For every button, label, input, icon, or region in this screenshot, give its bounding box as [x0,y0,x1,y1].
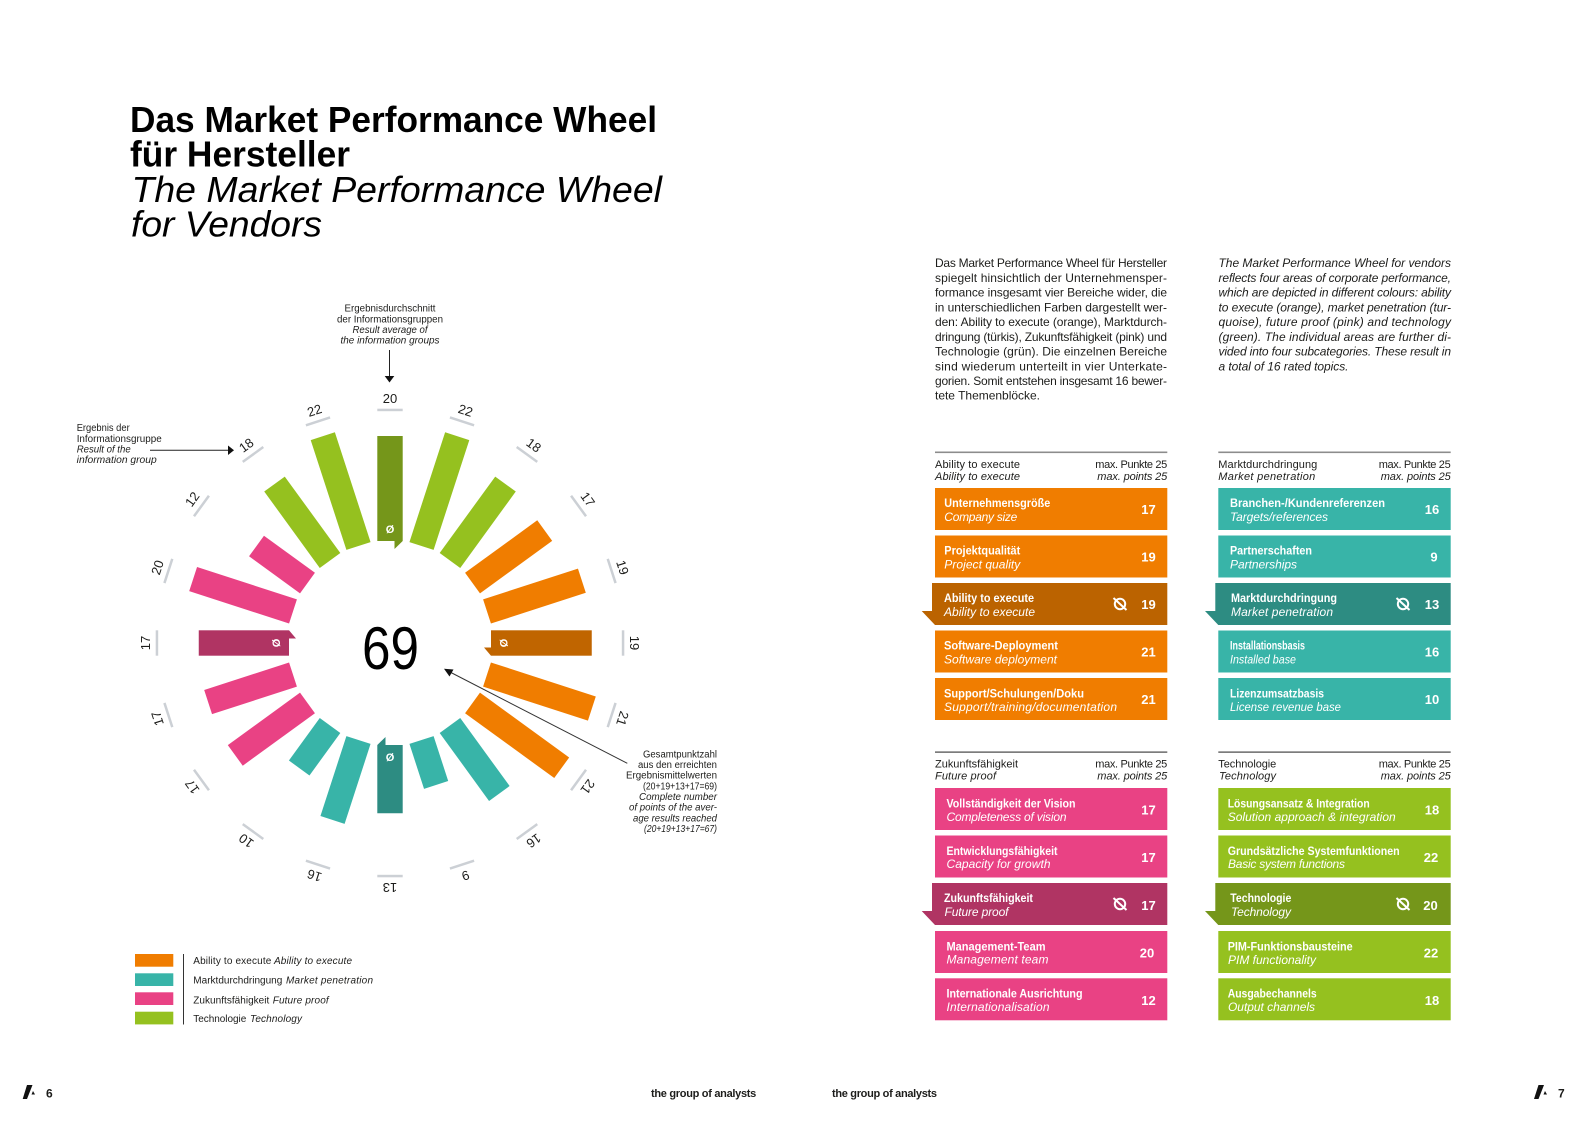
row: Projektqualität 19: 19 [1141,550,1156,564]
row: Ausgabechannels 18: 18 [1425,993,1439,1008]
callout: result average of the information groups: the information groups [340,336,440,347]
spoke: market penetration average 13: 13 [383,880,397,895]
panel heading: future proof: Future proof [935,771,997,783]
row: Ability to execute average 19: 19 [1141,597,1156,612]
panel heading: ability to execute: Ability to execute [935,459,1020,471]
panel heading: ability to execute: max. points 25 [1097,471,1168,483]
spoke: future proof 17: 17 [148,709,167,728]
text block: English intro: reflects four areas of corporate performance, [1218,271,1451,285]
arrow: to average result [385,350,394,382]
callout: total score explanation: (20+19+13+17=67) [644,824,717,835]
row: Grundsätzliche Systemfunktionen 22: 22 [1424,850,1438,865]
panel: market penetration [1205,452,1452,720]
callout: total score explanation [626,749,718,835]
row: Installationsbasis 16: Installed base [1230,652,1296,666]
text block: German intro: formance insgesamt vier Bereiche wider, die [935,286,1167,300]
spoke: future proof average 17: 17 [138,636,153,650]
arrow: to group result [150,446,234,455]
spoke: technology 18: 18 [523,435,544,456]
row: PIM-Funktionsbausteine 22: 22 [1424,946,1438,960]
spoke: technology 18 [232,432,340,568]
row: Vollständigkeit der Vision 17: 17 [1141,802,1156,818]
row: Vollständigkeit der Vision 17 [935,788,1167,830]
text block: German intro: sind wiederum unterteilt in vier Unterkate- [935,359,1167,373]
row: PIM-Funktionsbausteine 22: PIM functionality [1228,953,1317,967]
text block: German intro: Technologie (grün). Die einzelnen Bereiche [935,344,1167,358]
panel heading: market penetration: max. Punkte 25 [1379,459,1451,471]
row: Software-Deployment 21: Software deployment [944,652,1058,666]
title: The Market Performance Wheel [132,169,663,210]
text block: German intro: tete Themenblöcke. [935,388,1040,402]
spoke: market penetration average 13 [377,737,403,895]
row: Lizenzumsatzbasis 10 [1218,678,1451,720]
callout: total score explanation: Gesamtpunktzahl [643,749,717,760]
spoke: ability 19: 19 [613,558,632,577]
spoke: future proof 12 [179,485,315,593]
row: Zukunftsfähigkeit average 17: 17 [1141,898,1156,913]
spoke: future proof average 17 [138,630,296,656]
legend: Technology [250,1014,303,1025]
footer: left logo and page number: 6 [46,1086,53,1100]
row: PIM-Funktionsbausteine 22: PIM-Funktionsbausteine [1228,939,1353,953]
text block: English intro: a total of 16 rated topics. [1218,359,1348,373]
text block: English intro [1218,256,1452,373]
spoke: technology 22 [409,399,480,550]
row: Projektqualität 19: Projektqualität [944,544,1020,558]
text block: German intro: den: Ability to execute (orange), Marktdurch- [935,315,1167,329]
row: Software-Deployment 21 [935,630,1167,672]
row: Internationale Ausrichtung 12: Internationalisation [946,1000,1050,1014]
row: Installationsbasis 16 [1218,630,1451,672]
row: Entwicklungsfähigkeit 17: Capacity for growth [946,857,1051,871]
row: Marktdurchdringung average 13 [1205,583,1451,625]
row: Support/Schulungen/Doku 21: Support/training/documentation [944,700,1117,714]
callout: result of the information group: Informationsgruppe [77,434,162,445]
row: PIM-Funktionsbausteine 22 [1218,931,1451,973]
spoke: future proof 17: 17 [182,776,203,797]
callout: result average of the information groups: Ergebnisdurchschnitt [344,304,436,315]
row: Ausgabechannels 18: Ausgabechannels [1228,987,1317,1001]
panel heading: future proof: Zukunftsfähigkeit [935,759,1018,771]
spoke: future proof average 17: Ø [271,638,283,647]
row: Lösungsansatz & Integration 18 [1218,788,1451,830]
row: Partnerschaften 9: Partnerships [1230,558,1297,572]
callout: total score explanation: (20+19+13+17=69) [643,781,717,792]
row: Ability to execute average 19 [922,583,1167,625]
legend: Zukunftsfähigkeit [193,995,270,1006]
row: Vollständigkeit der Vision 17: Vollständigkeit der Vision [946,796,1076,810]
row: Partnerschaften 9: Partnerschaften [1230,544,1312,558]
panel heading: technology: max. Punkte 25 [1379,759,1451,771]
spoke: market penetration 9 [409,736,480,887]
row: Management-Team 20: Management-Team [946,939,1046,953]
callout: total score explanation: age results reached [633,813,717,824]
row: Marktdurchdringung average 13: Marktdurchdringung [1231,591,1337,605]
legend: Technologie [193,1014,247,1025]
row: Support/Schulungen/Doku 21 [935,678,1167,720]
callout: result of the information group [77,423,162,466]
row: Lösungsansatz & Integration 18: Solution approach & integration [1228,810,1396,824]
spoke: market penetration 10 [232,718,340,854]
text block: German intro: in unterschiedlichen Farben dargestellt wer- [935,300,1167,314]
row: Partnerschaften 9: 9 [1430,550,1438,564]
spoke: market penetration 16: 16 [305,866,324,885]
title: for Vendors [131,204,322,244]
row: Grundsätzliche Systemfunktionen 22 [1218,836,1451,878]
row: Software-Deployment 21: 21 [1141,644,1156,660]
row: Partnerschaften 9 [1218,536,1451,578]
row: Internationale Ausrichtung 12 [935,978,1167,1020]
text block: English intro: to execute (orange), market penetration (tur- [1218,300,1451,314]
spoke: ability 17: 17 [577,489,598,510]
callout: result of the information group: Ergebnis der [77,423,130,434]
spoke: technology 22 [300,399,371,550]
row: Unternehmensgröße 17: Unternehmensgröße [944,496,1051,510]
footer: right publisher: the group of analysts [832,1088,937,1100]
row: Technologie average 20 [1205,883,1451,925]
title: Das Market Performance Wheel [130,99,657,140]
text block: German intro [935,256,1167,402]
row: Support/Schulungen/Doku 21: 21 [1141,692,1156,707]
panel heading: market penetration: Market penetration [1218,471,1315,483]
footer: right logo and page number: 7 [1558,1086,1565,1100]
row: Lösungsansatz & Integration 18: 18 [1425,802,1439,818]
row: Installationsbasis 16: 16 [1425,644,1439,660]
spoke: ability average 19: Ø [497,639,509,648]
callout: result average of the information groups: Result average of [352,325,429,336]
row: Internationale Ausrichtung 12: Internationale Ausrichtung [946,987,1082,1001]
row: Lizenzumsatzbasis 10: License revenue base [1230,700,1341,714]
row: Technologie average 20: Technologie [1230,891,1292,905]
spoke: market penetration 16 [440,718,548,854]
spoke: ability 21 [483,662,634,733]
spoke: technology 18: 18 [236,435,257,456]
callout: total score explanation: aus den erreichten [638,760,717,771]
text block: German intro: dringung (türkis), Zukunftsfähigkeit (pink) und [935,330,1167,344]
legend [135,954,373,1025]
spoke: ability 17 [465,485,601,593]
row: Internationale Ausrichtung 12: 12 [1141,993,1156,1008]
callout: total score explanation: Ergebnismittelwerten [626,771,717,782]
row: Branchen-/Kundenreferenzen 16: Targets/references [1230,510,1328,524]
spoke: future proof 12: 12 [182,489,203,510]
row: Installationsbasis 16: Installationsbasis [1230,638,1305,652]
callout: total score explanation: Complete number [639,792,718,803]
row: Ausgabechannels 18 [1218,978,1451,1020]
callout: result average of the information groups: der Informationsgruppen [337,314,443,325]
row: Zukunftsfähigkeit average 17 [922,883,1167,925]
row: Ability to execute average 19: Ability to execute [944,591,1034,605]
spoke: market penetration 9: 9 [460,867,471,884]
panel heading: future proof: max. Punkte 25 [1095,759,1167,771]
text block: German intro: gorien. Somit entstehen insgesamt 16 bewer- [935,374,1167,388]
row: Lizenzumsatzbasis 10: 10 [1425,692,1439,707]
callout: total score explanation: of points of the aver- [629,803,718,814]
legend: Marktdurchdringung [193,975,282,986]
legend: Market penetration [286,975,373,986]
callout: result of the information group: Result of the [77,445,131,456]
panel: technology [1205,752,1452,1020]
text block: German intro: Das Market Performance Wheel für Hersteller [935,256,1167,270]
row: Software-Deployment 21: Software-Deployment [944,638,1058,652]
spoke: market penetration 10: 10 [236,830,257,851]
spoke: ability 21: 21 [613,709,632,728]
row: Projektqualität 19 [935,536,1167,578]
spoke: technology average 20 [377,391,403,549]
spoke: technology 22: 22 [456,401,475,420]
spoke: ability average 19: 19 [627,636,642,650]
row: Unternehmensgröße 17: 17 [1141,502,1156,517]
spoke: ability 19 [483,553,634,624]
row: Management-Team 20: 20 [1140,946,1154,960]
spoke: market penetration 16: 16 [523,830,544,851]
row: Technologie average 20: 20 [1423,898,1438,913]
spoke: market penetration average 13: Ø [386,752,395,764]
row: Management-Team 20: Management team [946,952,1048,966]
panel heading: future proof: max. points 25 [1097,771,1168,783]
row: Grundsätzliche Systemfunktionen 22: Grundsätzliche Systemfunktionen [1228,844,1400,858]
legend: Ability to execute [273,956,352,967]
panel heading: future proof [935,759,1168,783]
spoke: future proof 17 [146,662,297,733]
row: Unternehmensgröße 17: Company size [944,510,1018,524]
spoke: technology 22: 22 [305,401,324,420]
row: Zukunftsfähigkeit average 17: Future proof [944,905,1010,919]
text block: English intro: The Market Performance Wheel for vendors [1218,256,1451,270]
footer: left logo and page number [23,1085,53,1100]
row: Grundsätzliche Systemfunktionen 22: Basic system functions [1228,857,1345,871]
legend: Future proof [273,995,330,1006]
panel: future proof [922,752,1168,1020]
panel heading: technology: max. points 25 [1381,771,1452,783]
legend: Ability to execute [193,956,272,967]
title: für Hersteller [130,134,350,174]
title [130,99,663,244]
spoke: future proof 20 [146,553,297,624]
spoke: technology average 20: 20 [383,391,397,406]
row: Zukunftsfähigkeit average 17: Zukunftsfähigkeit [944,891,1033,905]
spoke: technology average 20: Ø [386,524,395,536]
row: Entwicklungsfähigkeit 17: 17 [1141,850,1156,865]
spoke: market penetration 16 [300,736,371,887]
text block: English intro: vided into four subcategories. These result in [1218,344,1451,358]
row: Branchen-/Kundenreferenzen 16: Branchen-/Kundenreferenzen [1230,496,1385,510]
row: Branchen-/Kundenreferenzen 16 [1218,488,1451,530]
row: Lizenzumsatzbasis 10: Lizenzumsatzbasis [1230,686,1324,700]
callout: result average of the information groups [337,304,443,347]
spoke: ability average 19 [484,630,642,656]
spoke: future proof 20: 20 [148,558,167,577]
row: Unternehmensgröße 17 [935,488,1167,530]
spoke: ability 21: 21 [577,776,598,797]
panel heading: ability to execute: max. Punkte 25 [1095,459,1167,471]
text block: English intro: (green). The individual areas are further di- [1218,330,1451,344]
footer: left publisher: the group of analysts [651,1088,756,1100]
row: Entwicklungsfähigkeit 17 [935,836,1167,878]
spoke: future proof 17 [179,693,315,801]
spoke: ability 21 [465,693,601,801]
row: Entwicklungsfähigkeit 17: Entwicklungsfähigkeit [946,844,1058,858]
row: Ability to execute average 19: Ability to execute [943,605,1035,619]
row: Lösungsansatz & Integration 18: Lösungsansatz & Integration [1228,796,1370,810]
panel: ability to execute [922,452,1168,720]
panel heading: market penetration: Marktdurchdringung [1218,459,1317,471]
wheel chart [138,391,642,895]
row: Ausgabechannels 18: Output channels [1228,1000,1315,1014]
panel heading: technology: Technologie [1218,759,1276,771]
panel heading: ability to execute [934,459,1168,483]
row: Support/Schulungen/Doku 21: Support/Schulungen/Doku [944,686,1084,700]
text block: English intro: quoise), future proof (pink) and technology [1218,315,1452,329]
row: Technologie average 20: Technology [1231,905,1292,919]
spoke: technology 18 [440,432,548,568]
text block: German intro: spiegelt hinsichtlich der Unternehmensper- [935,271,1167,285]
row: Management-Team 20 [935,931,1167,973]
panel heading: market penetration: max. points 25 [1381,471,1452,483]
text block: English intro: which are depicted in different colours: ability [1218,286,1452,300]
total score: 69 [362,615,419,682]
row: Vollständigkeit der Vision 17: Completeness of vision [946,810,1067,824]
panel heading: technology [1218,759,1452,783]
row: Branchen-/Kundenreferenzen 16: 16 [1425,502,1439,517]
panel heading: market penetration [1218,459,1452,483]
footer: right logo and page number [1534,1085,1565,1100]
callout: result of the information group: information group [77,455,157,466]
panel heading: technology: Technology [1219,771,1278,783]
row: Projektqualität 19: Project quality [944,558,1021,572]
arrow: to total score [444,669,627,763]
panel heading: ability to execute: Ability to execute [934,471,1020,483]
row: Marktdurchdringung average 13: Market penetration [1231,605,1333,619]
row: Marktdurchdringung average 13: 13 [1425,597,1439,612]
